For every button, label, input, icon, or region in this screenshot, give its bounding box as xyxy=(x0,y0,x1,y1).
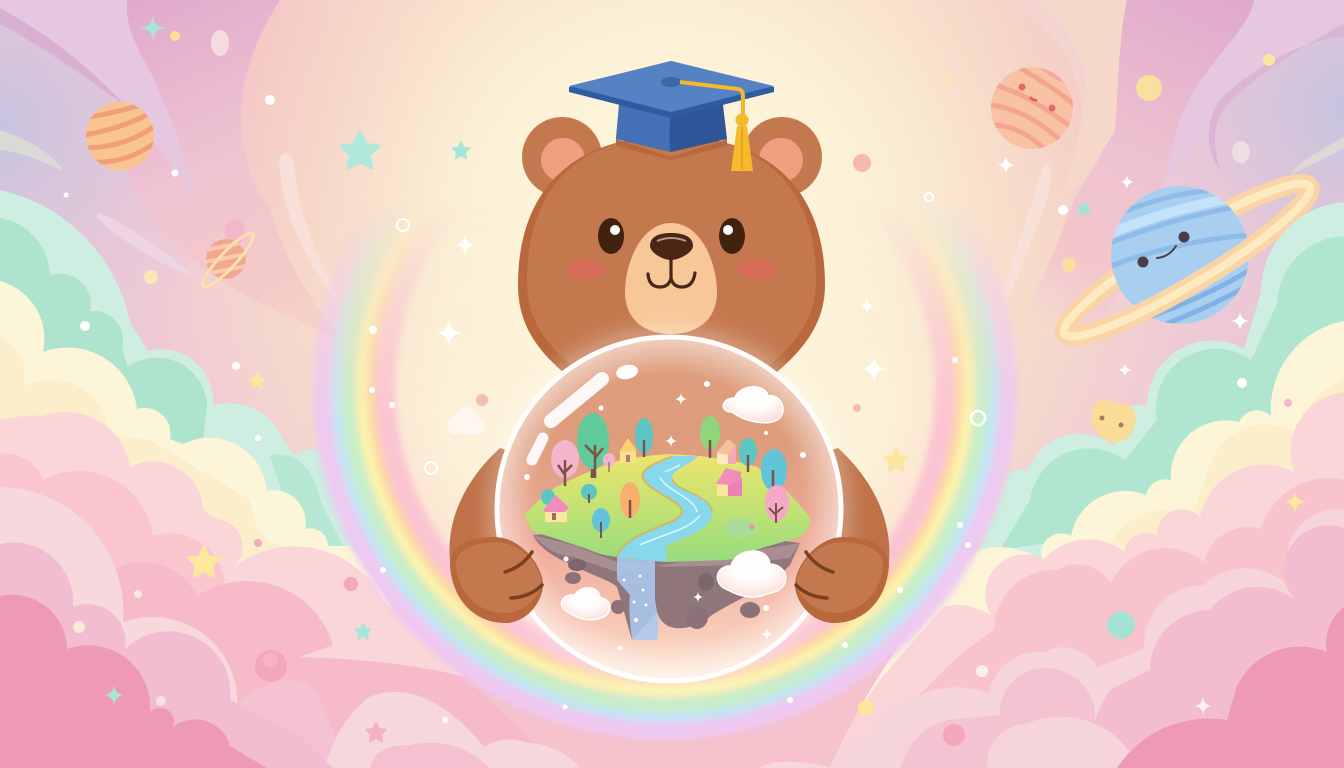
bear: right eye xyxy=(719,218,745,254)
bear: left eye xyxy=(598,218,624,254)
planet: small ringed xyxy=(201,232,255,288)
river xyxy=(617,456,712,562)
clouds: right bank xyxy=(759,202,1344,768)
cap tassel xyxy=(680,82,753,171)
bear: mouth xyxy=(648,258,695,287)
bush xyxy=(725,519,755,537)
small cloud outside globe xyxy=(447,407,485,435)
graduation cap xyxy=(569,61,774,171)
clouds: bottom base xyxy=(300,620,1060,768)
planet: peach smiling xyxy=(991,65,1075,150)
globe sparkles xyxy=(524,381,806,650)
globe clouds xyxy=(562,387,786,620)
bear: arms behind globe xyxy=(449,448,889,623)
floating island rock xyxy=(533,530,800,640)
trees xyxy=(541,413,789,538)
island grass xyxy=(525,454,810,562)
rainbow ring xyxy=(311,230,1019,742)
globe rim xyxy=(497,337,841,681)
pink blob behind small planet xyxy=(225,219,245,245)
globe highlights xyxy=(532,363,639,460)
planet: orange striped xyxy=(84,102,156,170)
bear: muzzle xyxy=(625,223,717,334)
yellow smiling blob xyxy=(1092,399,1136,442)
bear: right hand xyxy=(795,537,889,623)
glass globe xyxy=(487,327,851,691)
planet: blue ringed smiling xyxy=(1054,174,1320,346)
bear: nose xyxy=(650,233,693,260)
clouds: left bank xyxy=(0,190,580,768)
bear: ears xyxy=(522,117,822,197)
bear: head xyxy=(518,136,825,380)
bear: left hand xyxy=(450,537,543,623)
bear: cheeks xyxy=(567,259,776,279)
waterfall xyxy=(617,556,658,640)
houses xyxy=(543,438,742,522)
